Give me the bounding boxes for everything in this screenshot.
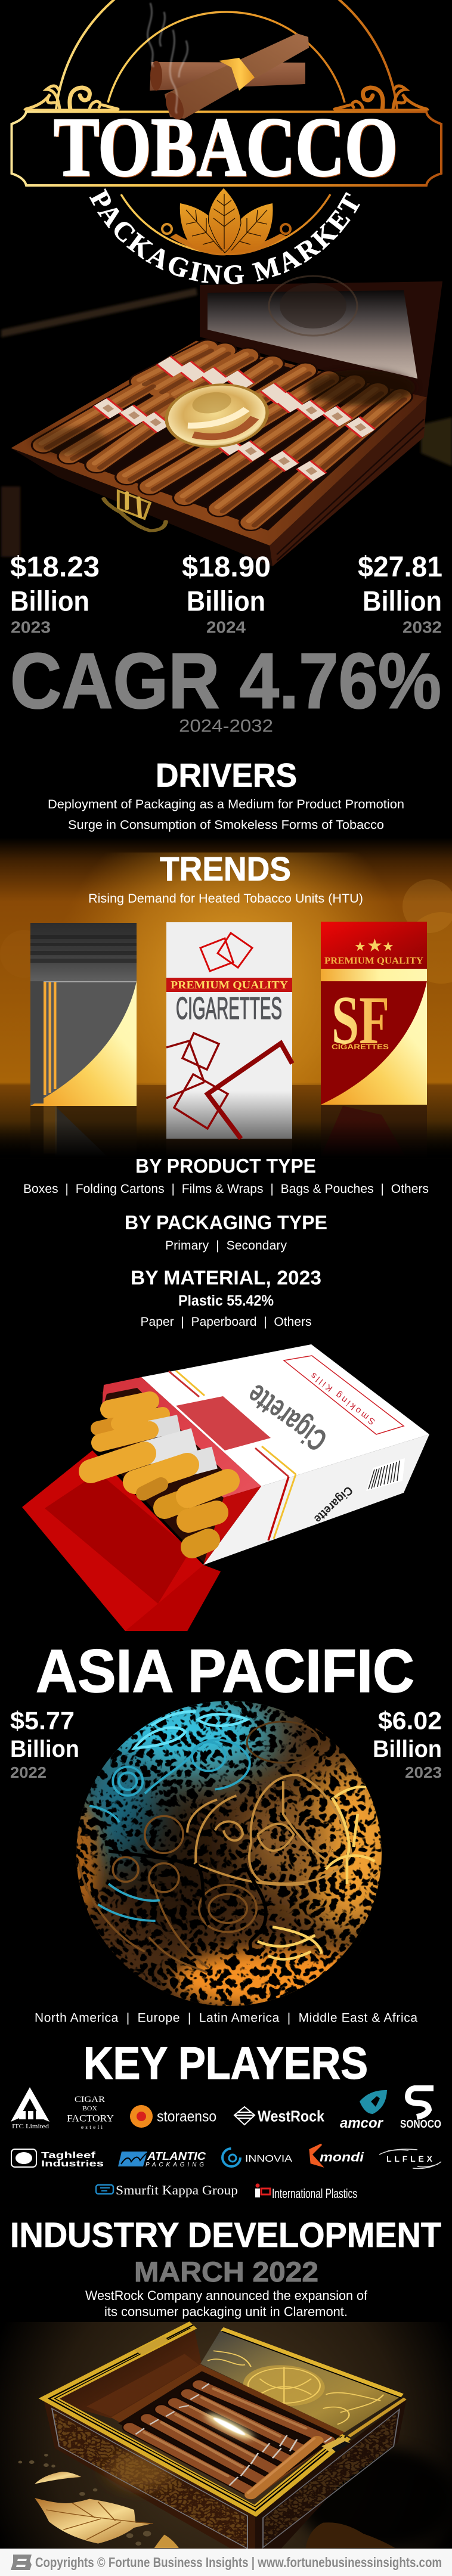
- development text: its consumer packaging unit in Claremont.: [104, 2304, 348, 2319]
- drivers: DRIVERS: [156, 756, 297, 794]
- asia pacific 2022 value: [10, 1706, 79, 1781]
- asia pacific 2023 value: Billion: [373, 1736, 442, 1762]
- top face: [141, 1344, 429, 1486]
- market value 2024: [182, 551, 271, 637]
- lid: [200, 2328, 403, 2432]
- date: MARCH 2022: [134, 2256, 318, 2287]
- logo: WestRock: [234, 2107, 324, 2125]
- logo: amcor: [340, 2090, 387, 2131]
- brass clasp: [104, 491, 166, 531]
- cigars: [41, 346, 404, 525]
- market value 2032: $27.81: [358, 551, 442, 583]
- pack: white: [166, 922, 292, 1139]
- right scroll ornaments: [335, 86, 428, 110]
- pack: red: ★: [382, 939, 394, 954]
- pack: grey: [30, 923, 137, 1106]
- market value 2023: [10, 551, 100, 637]
- banner frame: [12, 112, 441, 185]
- logo: Sonoco: [400, 2088, 441, 2130]
- pack inside: [101, 1383, 260, 1565]
- pack: red: ★: [354, 939, 366, 954]
- by product type: [23, 1155, 429, 1196]
- logo: International Plastics: International Plastics: [272, 2186, 357, 2201]
- ornate line work: [79, 1712, 374, 1972]
- lid gold border: [222, 2329, 403, 2395]
- logo: Smurfit Kappa: Smurfit Kappa Group: [116, 2183, 238, 2197]
- right side shadow: [294, 2446, 452, 2550]
- inner arc: [108, 12, 345, 103]
- logo: LLFlex: LLFLEX: [386, 2154, 433, 2163]
- rear wall: [44, 2324, 202, 2419]
- open lid: [22, 1450, 221, 1631]
- logo: amcor: amcor: [340, 2115, 384, 2131]
- by packaging type: BY PACKAGING TYPE: [125, 1211, 327, 1233]
- CAGR: 2024-2032: [179, 717, 273, 736]
- pack: red: ★: [367, 936, 383, 956]
- top logo squares: [200, 933, 252, 971]
- market value 2023: Billion: [10, 585, 89, 616]
- logo: Atlantic Packaging: [118, 2150, 206, 2168]
- box right side: [255, 2398, 407, 2549]
- asia pacific heading: ASIA PACIFIC: [36, 1637, 414, 1705]
- logo: Cigar Box Factory: [67, 2095, 114, 2130]
- logo: LLFlex: [379, 2149, 441, 2169]
- face graphics: Cigarette: [241, 1377, 333, 1458]
- decorative sphere: [76, 1701, 382, 2006]
- logo: Atlantic Packaging: ATLANTIC: [147, 2150, 206, 2162]
- logo: WestRock: WestRock: [258, 2107, 324, 2125]
- logo: Cigar Box Factory: esteli: [81, 2124, 103, 2130]
- pack: red: CIGARETTES: [332, 1043, 389, 1051]
- reflections: [0, 1105, 452, 1158]
- face graphics: Smoking Kills: [309, 1371, 377, 1427]
- tray with cigars: [11, 341, 427, 566]
- market value 2024: Billion: [187, 585, 265, 616]
- logo: Mondi: [310, 2144, 364, 2166]
- icon: tobacco leaves: [162, 188, 290, 255]
- gold medal: [151, 373, 283, 458]
- heading: TRENDS: [160, 850, 291, 888]
- asia pacific 2023 value: $6.02: [378, 1706, 442, 1735]
- logo: Taghleef Industries: Industries: [41, 2159, 104, 2169]
- amber backdrop: [0, 838, 452, 1160]
- title badge: [11, 0, 442, 284]
- icon: smoke: [147, 3, 188, 113]
- market value 2024: 2024: [206, 618, 246, 637]
- cigar bands: [100, 362, 369, 476]
- logo: Taghleef Industries: [11, 2149, 104, 2169]
- footer: [0, 2549, 452, 2576]
- drivers: Deployment of Packaging as a Medium for Product Promotion: [48, 798, 404, 811]
- clasp: [321, 2436, 351, 2452]
- development text: [85, 2288, 368, 2319]
- texture: [72, 1699, 388, 2009]
- logo: Cigar Box Factory: CIGAR: [75, 2095, 105, 2104]
- box left side: [44, 2398, 255, 2549]
- trend text: Rising Demand for Heated Tobacco Units (HTU): [88, 892, 363, 906]
- bottom photo: cigar box: [0, 2322, 452, 2550]
- leaves: [35, 2472, 81, 2484]
- by packaging type: [125, 1211, 327, 1253]
- market value 2032: 2032: [403, 618, 442, 637]
- hinge: [134, 2336, 169, 2355]
- key players heading: KEY PLAYERS: [83, 2038, 368, 2089]
- inner wood wall: [86, 2354, 199, 2416]
- outer arc: [56, 0, 397, 109]
- side face: [203, 1434, 429, 1565]
- glows: [83, 1687, 274, 1777]
- by packaging type: Primary | Secondary: [165, 1239, 287, 1253]
- cigarettes: [91, 1401, 228, 1547]
- face graphics: Cigarette: [311, 1483, 355, 1526]
- market value 2023: 2023: [11, 618, 51, 637]
- trends panel: [0, 838, 452, 1160]
- drivers: Surge in Consumption of Smokeless Forms of Tobacco: [68, 818, 384, 832]
- asia pacific 2023 value: [373, 1706, 442, 1781]
- by material: BY MATERIAL, 2023: [131, 1266, 321, 1289]
- by material: Paper | Paperboard | Others: [141, 1315, 311, 1329]
- market value 2032: [358, 551, 442, 637]
- market value 2024: $18.90: [182, 551, 271, 583]
- lid interior: [200, 276, 442, 398]
- gold rim: [49, 2325, 405, 2511]
- texture on sides: [53, 2413, 246, 2547]
- logo: Taghleef Industries: Taghleef: [41, 2150, 96, 2160]
- by material: Plastic 55.42%: [178, 1292, 274, 1309]
- development text: WestRock Company announced the expansion of: [85, 2288, 368, 2303]
- hero photo: open cigar box: [1, 276, 452, 566]
- pack: red: SF: [332, 982, 389, 1059]
- by product type: Boxes | Folding Cartons | Films & Wraps | Bags & Pouches | Others: [23, 1182, 429, 1196]
- pack: red: [321, 922, 427, 1105]
- logo: Atlantic Packaging: PACKAGING: [145, 2162, 204, 2168]
- rim: [11, 341, 427, 545]
- logo: Cigar Box Factory: BOX: [82, 2106, 98, 2112]
- footer logo: [11, 2555, 32, 2570]
- icon: crossed cigars: [150, 33, 309, 122]
- logo: Innovia: [222, 2149, 292, 2166]
- by material: [131, 1266, 321, 1329]
- tray interior: [111, 2364, 345, 2499]
- logo: Stora Enso: storaenso: [157, 2108, 216, 2125]
- logo: Mondi: mondi: [320, 2151, 364, 2164]
- box sides: [11, 448, 273, 566]
- pack: red: PREMIUM QUALITY: [324, 956, 423, 966]
- logo: ITC: ITC Limited: [12, 2124, 49, 2130]
- asia pacific 2022 value: 2022: [10, 1763, 47, 1781]
- logo: Sonoco: SONOCO: [400, 2118, 441, 2130]
- logo: Cigar Box Factory: FACTORY: [67, 2114, 114, 2124]
- asia pacific 2023 value: 2023: [405, 1763, 442, 1781]
- logo: ITC: [11, 2087, 49, 2130]
- market value 2032: Billion: [363, 585, 442, 616]
- drivers: [48, 756, 404, 832]
- market value 2023: $18.23: [10, 551, 100, 583]
- by product type: BY PRODUCT TYPE: [135, 1155, 316, 1177]
- asia pacific 2022 value: Billion: [10, 1736, 79, 1762]
- pack: white: PREMIUM QUALITY: [171, 979, 288, 991]
- shading: [306, 370, 415, 405]
- pack: white: CIGARETTES: [176, 991, 282, 1026]
- other regions: North America | Europe | Latin America | Middle East & Africa: [35, 2011, 417, 2025]
- logo: Stora Enso: [130, 2105, 216, 2128]
- face graphics: [169, 1356, 405, 1540]
- asia pacific 2022 value: $5.77: [10, 1706, 75, 1735]
- subtitle on arc: PACKAGING MARKET: [89, 188, 360, 284]
- cigars: [130, 2383, 332, 2495]
- logo: Innovia: INNOVIA: [245, 2154, 292, 2164]
- industry development heading: INDUSTRY DEVELOPMENT: [10, 2216, 441, 2255]
- cigarette pack illustration: [22, 1344, 429, 1631]
- logo: International Plastics: [255, 2183, 357, 2201]
- left scroll ornaments: [24, 86, 118, 110]
- red rim: [101, 1377, 261, 1498]
- bottom arc: [121, 194, 330, 253]
- crumbs: [18, 2454, 151, 2546]
- lower pattern: [166, 1033, 228, 1129]
